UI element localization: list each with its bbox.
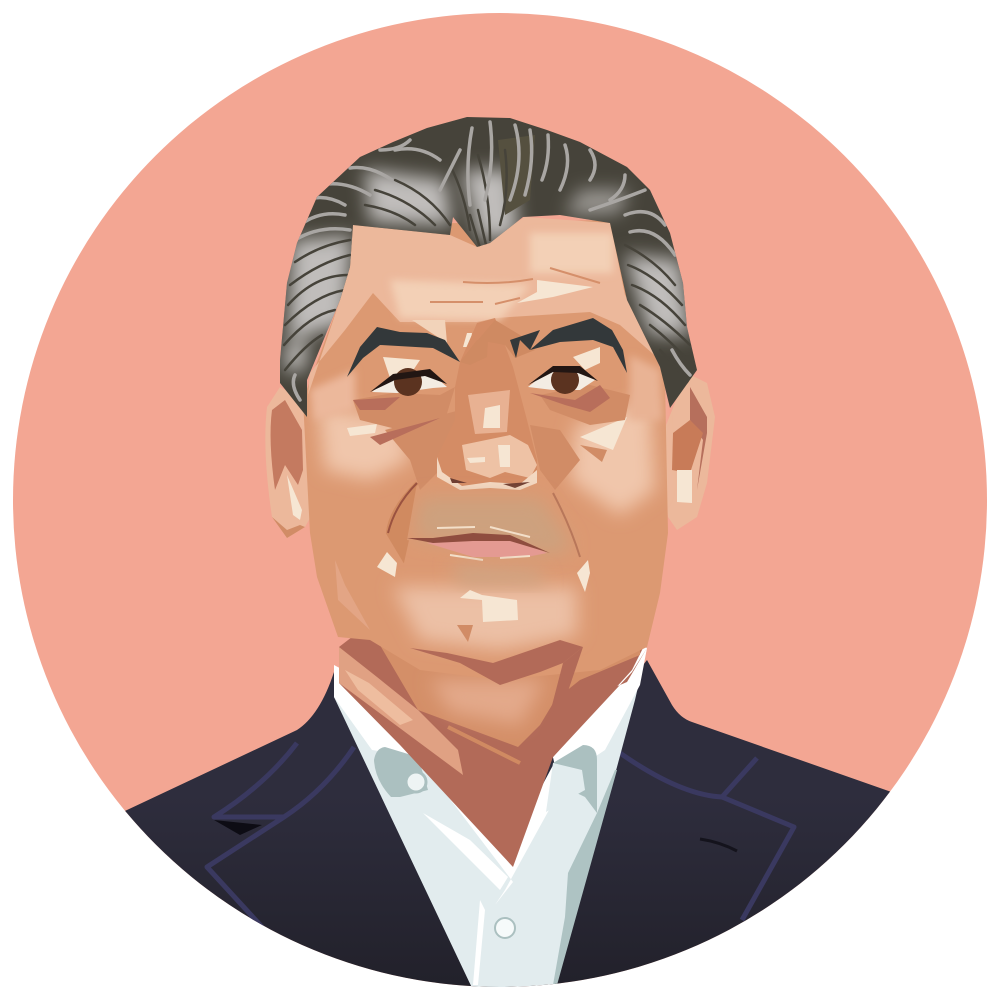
grey hair streaks [293, 122, 690, 400]
nose [437, 318, 537, 490]
cheeks [318, 405, 410, 480]
jacket [100, 660, 900, 1000]
shirt buttons [406, 772, 426, 792]
shirt [334, 640, 647, 990]
grey patches [285, 170, 690, 372]
eyebrows [347, 318, 627, 377]
forehead [308, 217, 660, 395]
upper lip area [415, 498, 572, 555]
left lapel edge [207, 743, 354, 927]
placket shadow [553, 770, 617, 985]
figure [100, 105, 900, 1000]
jacket pocket slit [700, 839, 737, 851]
chin shadow [410, 640, 583, 685]
eye sockets [353, 387, 455, 430]
face [303, 217, 668, 757]
eyes [370, 366, 598, 396]
right collar white [553, 648, 647, 762]
right lapel edge [620, 753, 794, 920]
hair [280, 117, 697, 417]
chin [393, 587, 577, 650]
dark hair streaks [284, 150, 695, 385]
mouth [407, 527, 550, 560]
smile lines [388, 483, 417, 558]
neck [339, 638, 642, 867]
ears [265, 373, 715, 538]
shirt white edges [334, 640, 647, 905]
collar shadows [374, 747, 428, 797]
